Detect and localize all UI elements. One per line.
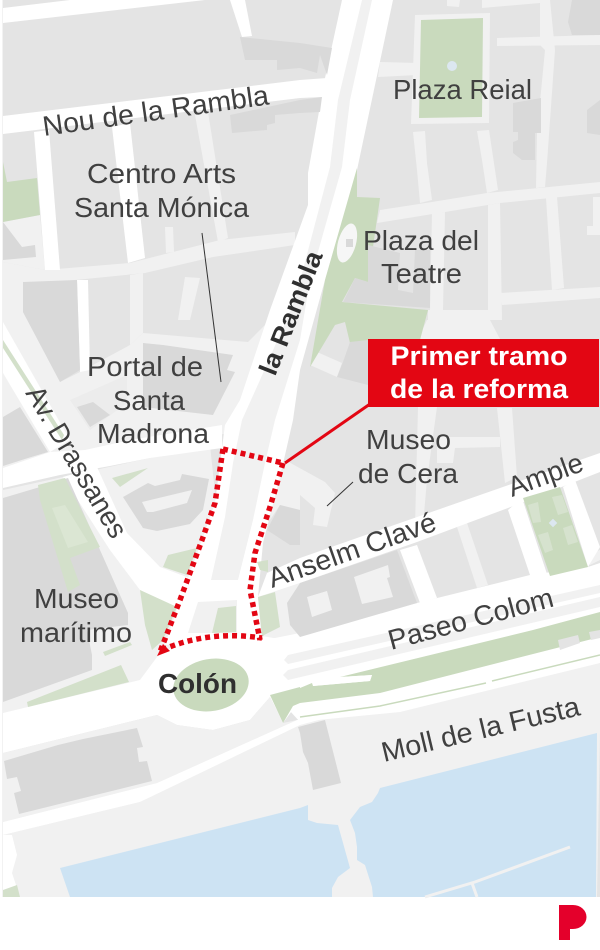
callout connector line — [285, 404, 370, 463]
map: pedestrian streets and squares — [3, 0, 600, 715]
leader line: Museo de Cera — [327, 482, 353, 506]
label: Colón: Colón — [158, 668, 237, 699]
logo: El Periódico P — [559, 905, 586, 940]
label: Plaza del Teatre: Plaza del — [363, 225, 479, 256]
label: Museo marítimo: Museo — [34, 583, 119, 614]
street label: Anselm Clavé: Anselm Clavé — [264, 506, 440, 594]
street label: Av. Drassanes: Av. Drassanes — [20, 380, 134, 543]
label: Portal de Santa Madrona — [87, 351, 209, 449]
street label: la Rambla: la Rambla — [253, 246, 329, 379]
water: port — [60, 733, 597, 897]
pier lines — [425, 847, 570, 897]
label: Portal de Santa Madrona: Portal de — [87, 351, 203, 382]
street label: Paseo Colom: Paseo Colom — [385, 582, 557, 656]
street label: Moll de la Fusta: Moll de la Fusta — [378, 691, 583, 768]
label: Museo de Cera: Museo — [366, 424, 451, 455]
map: details on buildings — [38, 61, 557, 617]
label: Portal de Santa Madrona: Madrona — [97, 418, 209, 449]
label: Plaza Reial: Plaza Reial — [393, 74, 532, 105]
label: Plaza del Teatre — [363, 225, 479, 289]
label: Museo de Cera: de Cera — [358, 458, 458, 489]
map: Paseo Colom service lanes — [188, 585, 600, 680]
map: buildings — [3, 0, 600, 702]
label: Centro Arts Santa Mónica — [74, 158, 249, 223]
street label: Nou de la Rambla: Nou de la Rambla — [41, 79, 271, 142]
callout: Primer tramo de la reforma — [368, 339, 599, 407]
map: white main streets — [3, 0, 600, 753]
label: Portal de Santa Madrona: Santa — [113, 385, 185, 416]
map: port light surface — [3, 663, 600, 897]
label: Museo de Cera — [358, 424, 458, 489]
leader line: Centro Arts Santa Mónica — [202, 233, 221, 382]
street label: Ample: Ample — [503, 447, 587, 503]
callout: Primer tramo de la reforma: de la reforma — [390, 374, 569, 404]
map: Rambla central promenade — [211, 0, 372, 580]
label: Museo marítimo: marítimo — [20, 617, 132, 648]
callout: Primer tramo de la reforma: Primer tramo — [390, 341, 568, 371]
highlighted area: first section, red dotted outline — [157, 449, 283, 656]
label: Centro Arts Santa Mónica: Centro Arts — [87, 158, 236, 189]
label: Museo marítimo — [20, 583, 132, 648]
label: Centro Arts Santa Mónica: Santa Mónica — [74, 192, 249, 223]
label: Plaza del Teatre: Teatre — [381, 258, 462, 289]
